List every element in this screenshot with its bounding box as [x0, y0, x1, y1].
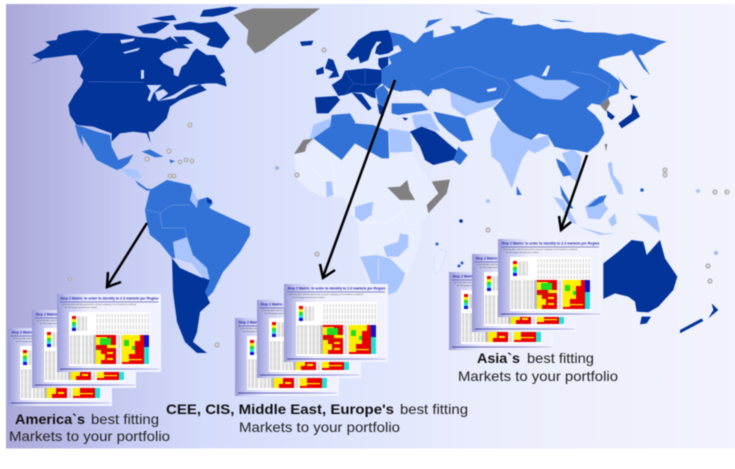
small island markers [68, 48, 729, 347]
report card: America back [8, 328, 112, 406]
world map [30, 7, 729, 353]
report card: Asia front: b) One page overview per market [506, 251, 539, 254]
report card: CEE back: b) One page overview per market [243, 330, 276, 333]
Baltic states [378, 57, 388, 70]
report card: CEE back [235, 318, 339, 396]
report card: CEE front: a) Using data and the parameters of your company, set of markets is defined [289, 293, 364, 296]
Asia [388, 10, 667, 195]
caption: Asia: Asia`s [477, 350, 520, 366]
Mexico and Central America [75, 125, 175, 191]
caption: America [9, 411, 170, 444]
Continental Europe [332, 68, 382, 98]
Africa [294, 113, 450, 297]
report card: America back: Step 2 Matrix: In order to identify to 2-3 markets per Region [12, 330, 110, 334]
report card: CEE middle: b) One page overview per market [265, 312, 298, 315]
report card: America middle: Step 2 Matrix: In order to identify to 2-3 markets per Region [36, 312, 134, 316]
caption: Asia [458, 350, 618, 384]
Country borders of Europe [345, 68, 382, 95]
Australia and New Zealand [603, 240, 718, 333]
report card: CEE front: b) One page overview per market [292, 296, 325, 299]
caption: America: America`s [15, 411, 85, 427]
Balkans [375, 85, 388, 107]
caption: CEE, CIS, Middle East, Europe: best fitting [400, 401, 468, 417]
report card: CEE back: a) Using data and the parameters of your company, set of markets is defined [240, 327, 315, 330]
caption: America: Markets to your portfolio [9, 428, 170, 444]
Canadian lakes and Great Lakes [120, 38, 200, 102]
report card: America middle: a) Using data and the parameters of your company, set of markets is defined [37, 319, 112, 322]
Ukraine and Belarus [382, 63, 415, 92]
United Kingdom [325, 58, 339, 78]
report card: Asia back: a) Using data and the parameters of your company, set of markets is defined [454, 281, 529, 284]
Russia, Kazakhstan and China [388, 17, 667, 153]
US and Canada border lines [80, 33, 143, 82]
report card: Asia front: a) Using data and the parameters of your company, set of markets is defined [503, 248, 578, 251]
report stack: Asia [449, 239, 602, 350]
Western Russia [388, 30, 433, 92]
report card: America front: b) One page overview per market [65, 306, 98, 309]
report card: Asia front: Step 2 Matrix: In order to identify to 2-3 markets per Region [502, 242, 600, 246]
report card: Asia middle: Step 2 Matrix: In order to identify to 2-3 markets per Region [476, 256, 574, 260]
report card: America front [57, 294, 161, 372]
North America: Canada and United States [30, 7, 238, 143]
report card: Asia middle: a) Using data and the parameters of your company, set of markets is defined [477, 263, 552, 266]
caption: Asia: Markets to your portfolio [458, 368, 618, 384]
report stack: CEE, CIS, Middle East, Europe [235, 284, 388, 396]
report card: CEE front: Step 2 Matrix: In order to identify to 2-3 markets per Region [288, 286, 386, 290]
arrow: CEE, CIS, Middle East, Europe [320, 80, 395, 278]
South America [145, 180, 250, 353]
arrow: Asia [559, 155, 587, 230]
report card: CEE middle [257, 300, 361, 378]
Southeast Asia [553, 144, 660, 235]
report card: CEE back: Step 2 Matrix: In order to identify to 2-3 markets per Region [238, 320, 336, 324]
Ireland [316, 67, 324, 75]
arrow: America [107, 223, 147, 287]
caption: America: best fitting [91, 411, 159, 427]
Greece [377, 103, 385, 117]
Italy [352, 93, 372, 111]
caption: CEE, CIS, Middle East, Europe: Markets to your portfolio [239, 419, 400, 435]
caption: Asia: best fitting [527, 350, 594, 366]
report card: America back: a) Using data and the parameters of your company, set of markets is defined [13, 337, 88, 340]
Europe [300, 30, 433, 117]
report card: Asia middle [472, 254, 576, 332]
report card: America front: a) Using data and the parameters of your company, set of markets is defined [62, 303, 137, 306]
report card: America middle: b) One page overview per market [40, 322, 73, 325]
report stack: America [8, 294, 161, 406]
Iceland [300, 41, 313, 46]
report card: CEE middle: Step 2 Matrix: In order to identify to 2-3 markets per Region [260, 302, 358, 306]
Black Sea, Caspian Sea and Baltic Sea [393, 65, 550, 113]
report card: CEE middle: a) Using data and the parameters of your company, set of markets is defined [262, 309, 337, 312]
report card: Asia back: b) One page overview per market [457, 284, 490, 287]
report card: Asia front [498, 239, 602, 317]
report card: America front: Step 2 Matrix: In order to identify to 2-3 markets per Region [60, 296, 158, 300]
report card: Asia back: Step 2 Matrix: In order to identify to 2-3 markets per Region [452, 274, 550, 278]
Scandinavia and Finland [347, 30, 393, 63]
report card: America back: b) One page overview per market [16, 340, 49, 343]
caption: CEE, CIS, Middle East, Europe [166, 401, 468, 435]
Spain and Portugal [315, 96, 340, 113]
Kazakhstan and China borders [430, 67, 610, 103]
report card: Asia back [449, 272, 553, 350]
caption: CEE, CIS, Middle East, Europe: CEE, CIS, Middle East, Europe's [166, 401, 394, 417]
Greenland [233, 8, 320, 53]
report card: CEE front [284, 284, 388, 362]
report card: America middle [32, 310, 136, 388]
report card: Asia middle: b) One page overview per market [480, 266, 513, 269]
